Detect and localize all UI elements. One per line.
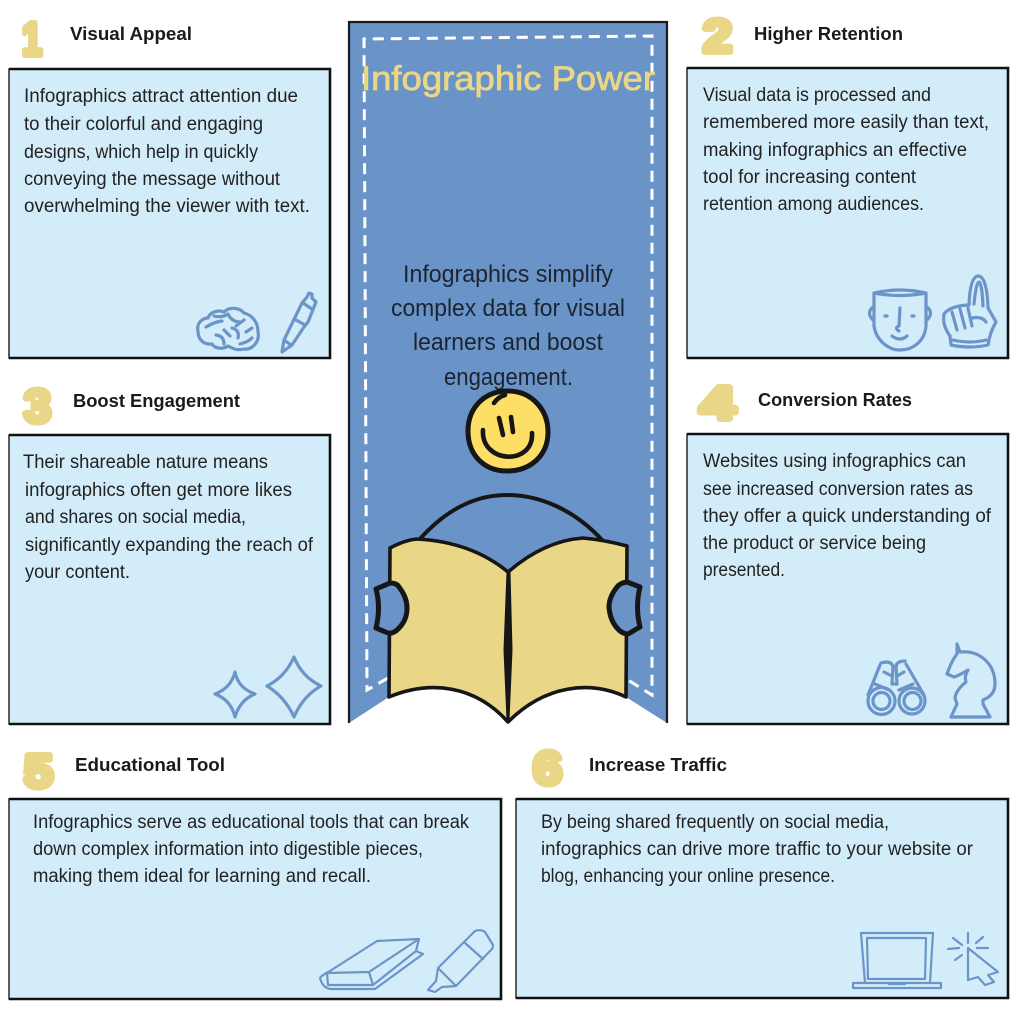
body text xyxy=(703,85,989,215)
body text: and shares on social media, xyxy=(25,507,246,528)
icon: brain xyxy=(198,308,258,350)
title: Infographic Power xyxy=(361,60,655,98)
number 5: 5 xyxy=(24,745,53,797)
right hand xyxy=(609,582,640,634)
panel: 2 Higher Retention xyxy=(687,10,1008,358)
body text: designs, which help in quickly xyxy=(24,142,258,163)
body text: By being shared frequently on social media, xyxy=(541,812,889,833)
body text: overwhelming the viewer with text. xyxy=(24,196,310,217)
body text: infographics often get more likes xyxy=(25,480,292,501)
icon: highlighter xyxy=(428,930,493,992)
panel: 1 Visual Appeal xyxy=(9,13,330,358)
body text: infographics can drive more traffic to your website or xyxy=(541,839,974,860)
body text: significantly expanding the reach of xyxy=(25,535,314,556)
body text: making infographics an effective xyxy=(703,140,967,161)
icon: book xyxy=(320,939,423,989)
heading: Educational Tool xyxy=(75,755,225,775)
body text xyxy=(33,812,469,887)
heading: Higher Retention xyxy=(754,24,903,44)
body text xyxy=(23,452,314,583)
icon: laptop xyxy=(853,933,941,988)
body text: they offer a quick understanding of xyxy=(703,506,992,527)
number 4: 4 xyxy=(700,377,736,429)
left hand xyxy=(376,583,407,633)
card xyxy=(687,68,1008,358)
card xyxy=(516,799,1008,998)
panel: central ribbon xyxy=(349,22,667,723)
central description: learners and boost xyxy=(413,329,603,356)
body text: retention among audiences. xyxy=(703,194,924,215)
illustration: person reading a book xyxy=(376,495,640,722)
body text: Infographics serve as educational tools that can break xyxy=(33,812,469,833)
stitched dashed border xyxy=(364,36,652,695)
heading: Visual Appeal xyxy=(70,24,192,44)
heading: Conversion Rates xyxy=(758,390,912,410)
body text xyxy=(24,86,310,217)
body text: Visual data is processed and xyxy=(703,85,931,106)
body text: see increased conversion rates as xyxy=(703,479,973,500)
body text: remembered more easily than text, xyxy=(703,112,989,133)
heading: Increase Traffic xyxy=(589,755,727,775)
icon: smiling face xyxy=(468,391,548,471)
icon: large sparkle xyxy=(267,657,321,717)
central description: Infographics simplify xyxy=(403,261,613,288)
card xyxy=(9,799,501,999)
icon: binoculars xyxy=(868,661,925,714)
body text: presented. xyxy=(703,560,785,581)
central description: complex data for visual xyxy=(391,295,625,322)
panel: 4 Conversion Rates xyxy=(687,377,1008,724)
card xyxy=(9,69,330,358)
body text: to their colorful and engaging xyxy=(24,114,263,135)
heading: Boost Engagement xyxy=(73,391,240,411)
icon: chess knight xyxy=(947,644,995,717)
number 2: 2 xyxy=(703,10,732,62)
icon: face xyxy=(870,290,930,350)
body text: down complex information into digestible pieces, xyxy=(33,839,423,860)
icon: cursor click xyxy=(948,933,998,985)
icon: pointing hand xyxy=(944,276,996,347)
body text: Their shareable nature means xyxy=(23,452,268,473)
person's head arc xyxy=(419,495,603,541)
body text: tool for increasing content xyxy=(703,167,917,188)
open book xyxy=(389,538,627,722)
body text: the product or service being xyxy=(703,533,926,554)
body text: conveying the message without xyxy=(24,169,281,190)
ribbon background xyxy=(349,22,667,723)
body text: blog, enhancing your online presence. xyxy=(541,866,835,887)
panel: 5 Educational Tool xyxy=(9,745,501,999)
body text: making them ideal for learning and recall. xyxy=(33,866,371,887)
body text: your content. xyxy=(25,562,130,583)
body text: Infographics attract attention due xyxy=(24,86,298,107)
panel: 6 Increase Traffic xyxy=(516,742,1008,998)
panel: 3 Boost Engagement xyxy=(9,380,330,724)
number 3: 3 xyxy=(24,380,51,432)
icon: pen xyxy=(282,293,316,352)
number 6: 6 xyxy=(533,742,562,794)
number 1: 1 xyxy=(22,13,42,65)
body text xyxy=(541,812,974,887)
body text xyxy=(703,451,992,581)
card xyxy=(9,435,330,724)
central description xyxy=(391,261,625,391)
central description: engagement. xyxy=(444,364,573,391)
card xyxy=(687,434,1008,724)
body text: Websites using infographics can xyxy=(703,451,966,472)
icon: small sparkle xyxy=(215,672,255,717)
